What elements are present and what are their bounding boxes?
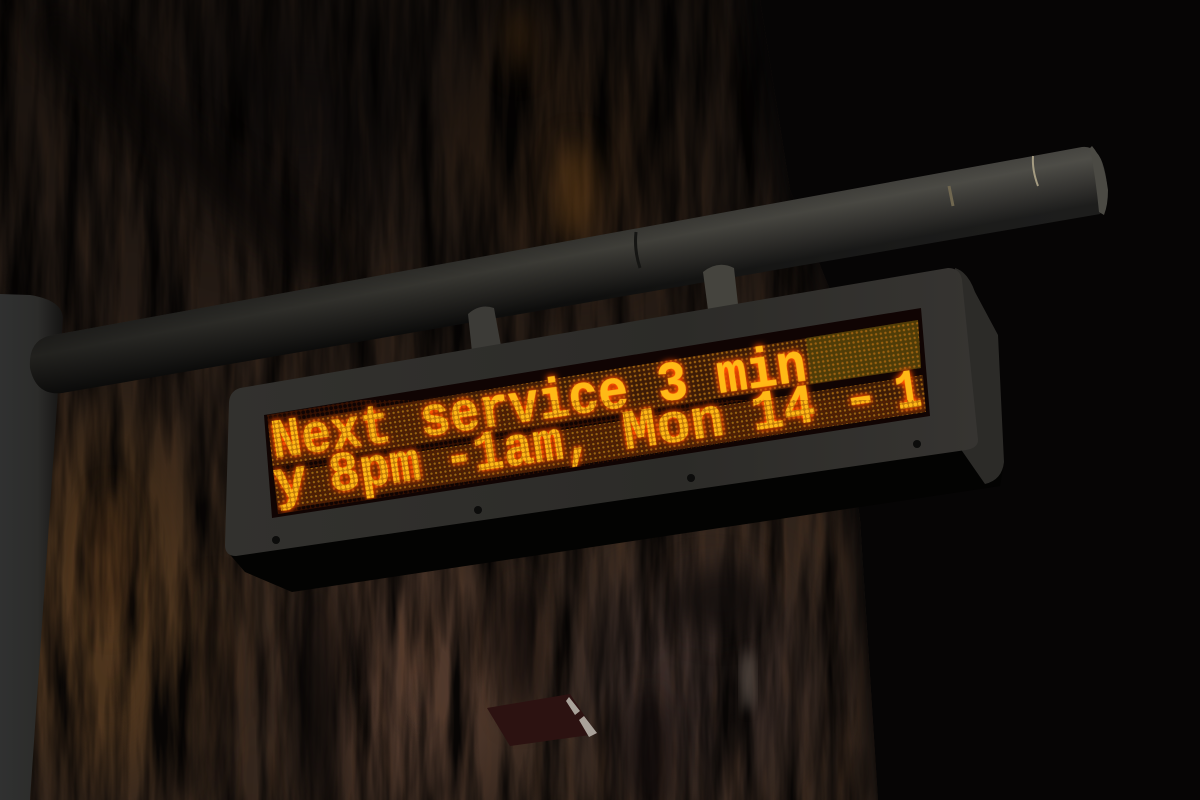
LED text: line 2: 14	[747, 375, 820, 447]
sign underside shadow	[226, 440, 1003, 592]
LED text: line 2: y	[269, 449, 312, 517]
LED text: line 2	[269, 359, 926, 517]
LED display panel	[264, 308, 930, 518]
LED text: line 2: 1	[891, 359, 926, 426]
small red box below sign	[487, 694, 597, 746]
rock wall	[0, 0, 940, 800]
right mounting bracket	[703, 265, 738, 310]
sign right side panel	[955, 268, 1004, 484]
LED text: line 1: Next service 3 min	[267, 334, 811, 475]
frame screws	[272, 440, 921, 544]
sign front face	[225, 268, 978, 556]
LED text: line 2: -	[836, 365, 885, 434]
left mounting bracket	[468, 306, 501, 352]
horizontal pipe	[30, 146, 1108, 393]
LED text: line 2: -1am,	[439, 407, 597, 492]
LED text: line 2: 8pm	[325, 432, 425, 509]
vertical pole	[0, 294, 63, 800]
LED text: line 2: Mon	[619, 388, 729, 466]
